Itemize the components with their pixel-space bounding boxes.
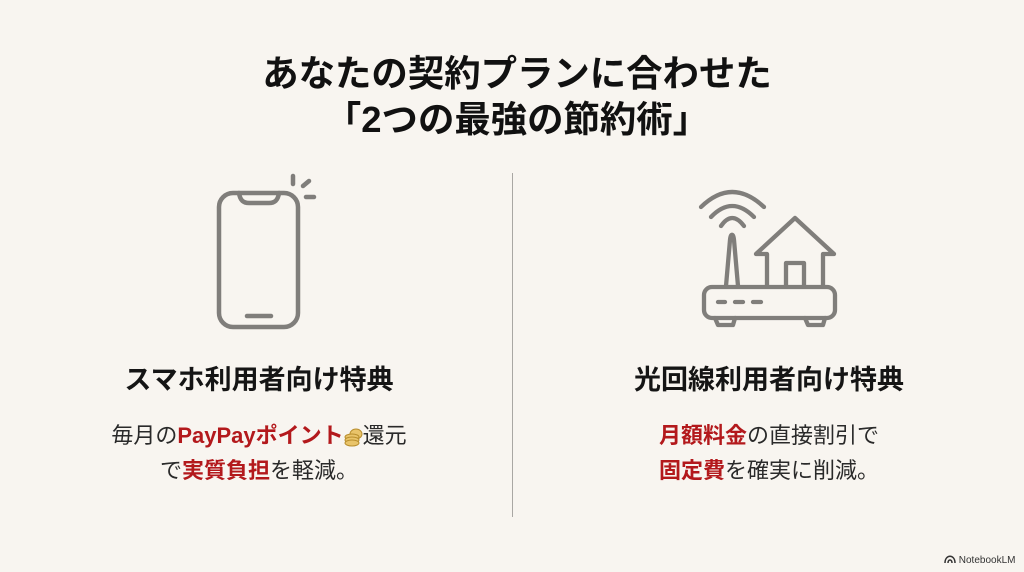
heading: fiber users: 光回線利用者向け特典 xyxy=(634,365,904,395)
text: fiber benefit xyxy=(659,423,879,483)
title: あなたの契約プランに合わせた xyxy=(262,53,772,94)
text: fiber benefit: 月額料金の直接割引で xyxy=(659,423,879,448)
logo: NotebookLM: NotebookLM xyxy=(959,555,1015,566)
heading: smartphone users: スマホ利用者向け特典 xyxy=(124,365,394,395)
icon: router and house xyxy=(698,190,838,328)
text: smartphone benefit: 毎月のPayPayポイント 還元 xyxy=(111,423,407,448)
center divider xyxy=(512,173,513,517)
text: smartphone benefit: で実質負担を軽減。 xyxy=(160,458,358,483)
text: fiber benefit: 固定費を確実に削減。 xyxy=(659,458,879,483)
title: 「2つの最強の節約術」 xyxy=(325,99,709,140)
icon: smartphone xyxy=(216,174,316,330)
title xyxy=(262,53,772,140)
text: smartphone benefit xyxy=(111,423,407,483)
